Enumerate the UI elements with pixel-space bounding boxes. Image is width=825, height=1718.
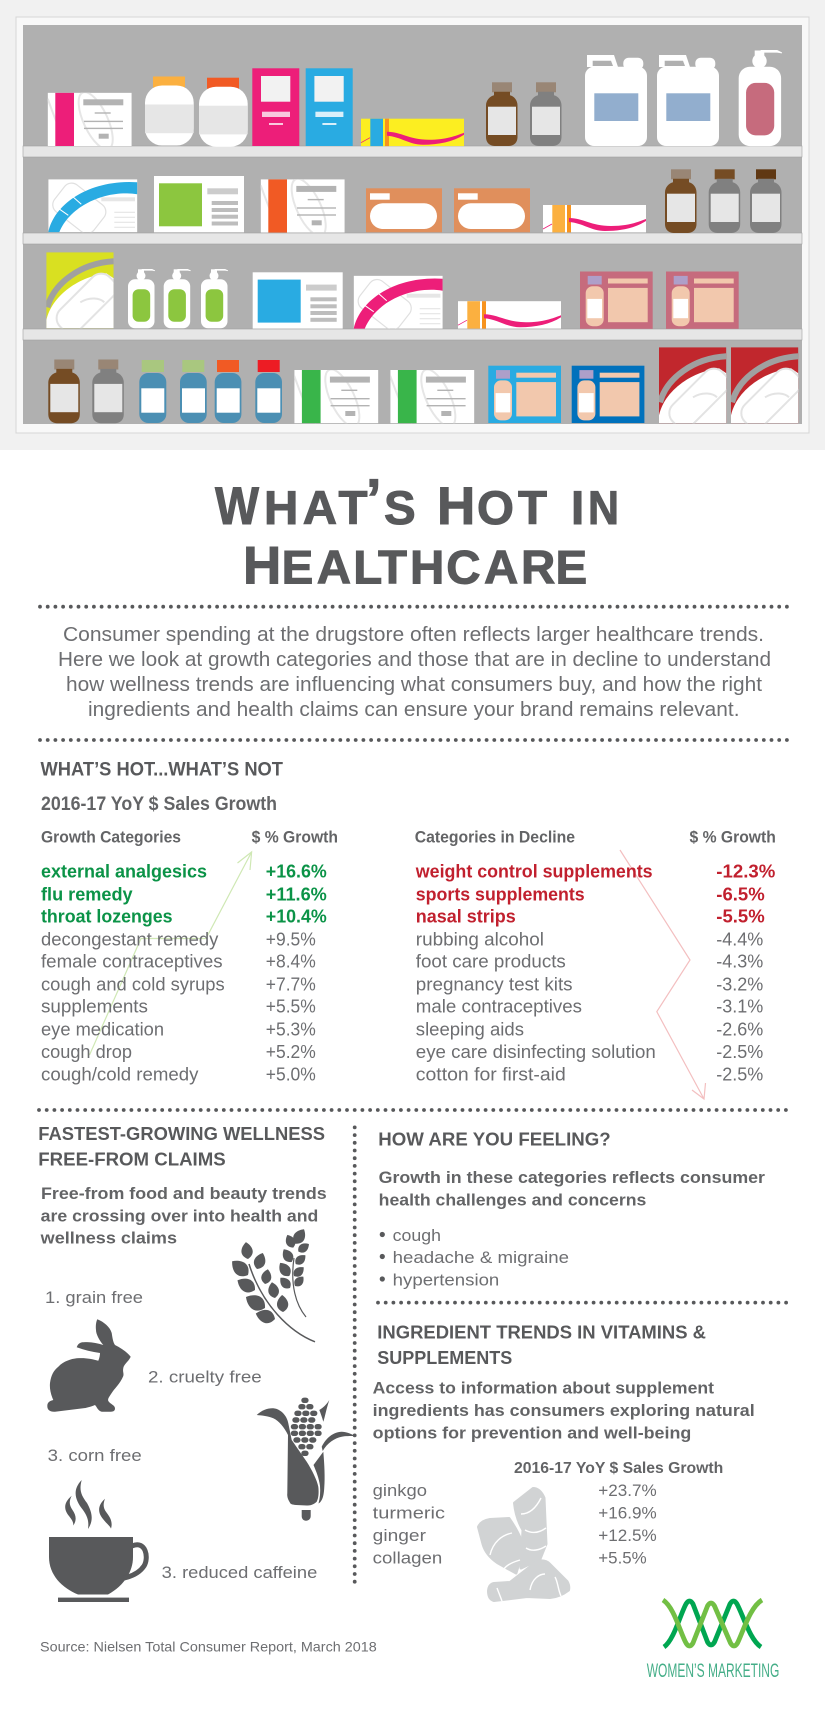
heading: free-from claims bbox=[38, 1124, 325, 1169]
table: categories in decline: rubbing alcohol bbox=[416, 928, 544, 949]
logo: women's marketing bbox=[647, 1600, 779, 1682]
table: ingredient growth: +5.5% bbox=[598, 1550, 647, 1568]
table: growth categories: female contraceptives bbox=[41, 951, 223, 972]
intro paragraph: ingredients and health claims can ensure your brand remains relevant. bbox=[88, 698, 740, 721]
table: categories in decline: -3.2% bbox=[716, 973, 763, 994]
table: categories in decline: -2.6% bbox=[716, 1018, 763, 1039]
table: categories in decline: eye care disinfecting solution bbox=[416, 1041, 656, 1062]
title bbox=[215, 467, 619, 595]
table: growth categories: +16.6% bbox=[266, 861, 327, 882]
table: categories in decline: -3.1% bbox=[716, 996, 763, 1017]
table: growth categories: +9.5% bbox=[266, 928, 316, 949]
source note: Source: Nielsen Total Consumer Report, March 2018 bbox=[40, 1638, 377, 1654]
intro paragraph: Consumer spending at the drugstore often reflects larger healthcare trends. bbox=[63, 623, 764, 646]
symptom list: cough bbox=[393, 1227, 441, 1245]
table: growth categories: Growth Categories bbox=[41, 829, 181, 847]
table: ingredient growth: turmeric bbox=[373, 1504, 445, 1522]
label: cruelty free: 2. cruelty free bbox=[148, 1368, 262, 1386]
table: categories in decline: Categories in Decline bbox=[415, 829, 575, 847]
icon: corn bbox=[257, 1400, 355, 1521]
feeling description: health challenges and concerns bbox=[379, 1190, 646, 1209]
table: growth categories: +5.3% bbox=[266, 1018, 316, 1039]
heading: how are you feeling: HOW ARE YOU FEELING? bbox=[378, 1130, 611, 1150]
heading: ingredient trends: INGREDIENT TRENDS IN VITAMINS & bbox=[377, 1323, 706, 1343]
table: growth categories: cough/cold remedy bbox=[41, 1063, 199, 1084]
shelf 2 products bbox=[48, 169, 782, 240]
label: corn free: 3. corn free bbox=[48, 1447, 142, 1465]
intro paragraph: Here we look at growth categories and those that are in decline to understand bbox=[58, 648, 771, 671]
table: ingredient growth: collagen bbox=[373, 1550, 442, 1568]
table: ingredient growth: +23.7% bbox=[598, 1482, 657, 1500]
table: categories in decline: -12.3% bbox=[716, 861, 775, 882]
table: categories in decline: pregnancy test kits bbox=[416, 973, 573, 994]
subheading: sales growth: 2016-17 YoY $ Sales Growth bbox=[41, 794, 277, 815]
table: growth categories bbox=[41, 829, 338, 1084]
symptom list: hypertension bbox=[393, 1272, 499, 1290]
symptom list bbox=[380, 1227, 569, 1290]
table: categories in decline: foot care products bbox=[416, 951, 566, 972]
table: growth categories: +11.6% bbox=[266, 883, 327, 904]
table: categories in decline: -2.5% bbox=[716, 1041, 763, 1062]
arrow: decline trend down bbox=[620, 850, 706, 1099]
label: reduced caffeine: 3. reduced caffeine bbox=[162, 1564, 317, 1582]
table: categories in decline: cotton for first-aid bbox=[416, 1063, 566, 1084]
heading: what's hot, what's not: WHAT’S HOT...WHAT’S NOT bbox=[40, 759, 283, 781]
title: I bbox=[571, 482, 584, 535]
table: categories in decline: male contraceptives bbox=[416, 996, 582, 1017]
table: growth categories: cough drop bbox=[41, 1041, 132, 1062]
heading: ingredient trends: SUPPLEMENTS bbox=[377, 1348, 512, 1368]
table: growth categories: +5.5% bbox=[266, 996, 316, 1017]
table: ingredient growth: ginger bbox=[373, 1527, 427, 1545]
table: categories in decline: sleeping aids bbox=[416, 1018, 524, 1039]
shelf 1 products bbox=[48, 50, 782, 154]
ingredient description: ingredients has consumers exploring natural bbox=[373, 1401, 755, 1420]
arrow: growth trend up bbox=[90, 852, 252, 1055]
table: growth categories: +10.4% bbox=[266, 906, 327, 927]
title: S bbox=[384, 482, 416, 535]
icon: coffee cup bbox=[49, 1480, 146, 1602]
feeling description bbox=[379, 1168, 765, 1209]
icon: wheat bbox=[228, 1226, 315, 1342]
feeling description: Growth in these categories reflects consumer bbox=[379, 1168, 765, 1187]
table: growth categories: throat lozenges bbox=[41, 906, 173, 927]
title: N bbox=[588, 482, 619, 535]
table: categories in decline: nasal strips bbox=[416, 906, 516, 927]
table: categories in decline: -4.4% bbox=[716, 928, 763, 949]
heading: free-from claims: FREE-FROM CLAIMS bbox=[38, 1149, 226, 1169]
table: ingredient growth bbox=[373, 1460, 723, 1568]
free-from description: Free-from food and beauty trends bbox=[41, 1184, 327, 1203]
table: growth categories: +5.0% bbox=[266, 1063, 316, 1084]
title: W bbox=[215, 477, 259, 536]
title: ’ bbox=[366, 467, 382, 530]
table: ingredient growth: +12.5% bbox=[598, 1527, 657, 1545]
label: grain free: 1. grain free bbox=[45, 1289, 143, 1307]
table: growth categories: $ % Growth bbox=[252, 829, 338, 847]
table: categories in decline: -4.3% bbox=[716, 951, 763, 972]
table: growth categories: flu remedy bbox=[41, 883, 133, 904]
shelf 3 products bbox=[46, 252, 739, 338]
table: categories in decline: sports supplements bbox=[416, 883, 585, 904]
title: OT bbox=[477, 482, 547, 535]
ingredient description bbox=[373, 1378, 755, 1442]
table: growth categories: eye medication bbox=[41, 1018, 164, 1039]
free-from description bbox=[40, 1184, 327, 1248]
heading: free-from claims: FASTEST-GROWING WELLNESS bbox=[38, 1124, 325, 1144]
table: ingredient growth: 2016-17 YoY $ Sales Growth bbox=[514, 1460, 723, 1477]
table: categories in decline bbox=[415, 829, 776, 1084]
table: ingredient growth: ginkgo bbox=[373, 1482, 427, 1500]
table: growth categories: supplements bbox=[41, 996, 148, 1017]
table: categories in decline: -5.5% bbox=[716, 906, 765, 927]
table: growth categories: decongestant remedy bbox=[41, 928, 219, 949]
table: growth categories: cough and cold syrups bbox=[41, 973, 225, 994]
symptom list: headache & migraine bbox=[393, 1249, 569, 1267]
table: growth categories: +7.7% bbox=[266, 973, 316, 994]
ingredient description: options for prevention and well-being bbox=[373, 1423, 691, 1442]
title: EALTHCARE bbox=[282, 541, 587, 594]
title: HAT bbox=[264, 482, 368, 535]
table: categories in decline: weight control supplements bbox=[415, 861, 653, 882]
shelf 4 products bbox=[48, 347, 806, 433]
intro paragraph: how wellness trends are influencing what consumers buy, and how the right bbox=[66, 673, 762, 696]
table: growth categories: +5.2% bbox=[266, 1041, 316, 1062]
icon: ginger root bbox=[478, 1488, 569, 1601]
table: categories in decline: -2.5% bbox=[716, 1063, 763, 1084]
free-from description: wellness claims bbox=[40, 1229, 177, 1248]
intro paragraph bbox=[58, 623, 771, 721]
table: growth categories: external analgesics bbox=[41, 861, 207, 882]
ingredient description: Access to information about supplement bbox=[373, 1378, 714, 1397]
heading: ingredient trends bbox=[377, 1323, 706, 1368]
icon: rabbit bbox=[47, 1319, 131, 1412]
table: ingredient growth: +16.9% bbox=[598, 1504, 657, 1522]
table: categories in decline: $ % Growth bbox=[690, 829, 776, 847]
title: H bbox=[243, 536, 281, 595]
free-from description: are crossing over into health and bbox=[41, 1207, 318, 1226]
title: H bbox=[437, 477, 475, 536]
table: categories in decline: -6.5% bbox=[716, 883, 765, 904]
table: growth categories: +8.4% bbox=[266, 951, 316, 972]
pharmacy shelves illustration bbox=[0, 0, 825, 450]
